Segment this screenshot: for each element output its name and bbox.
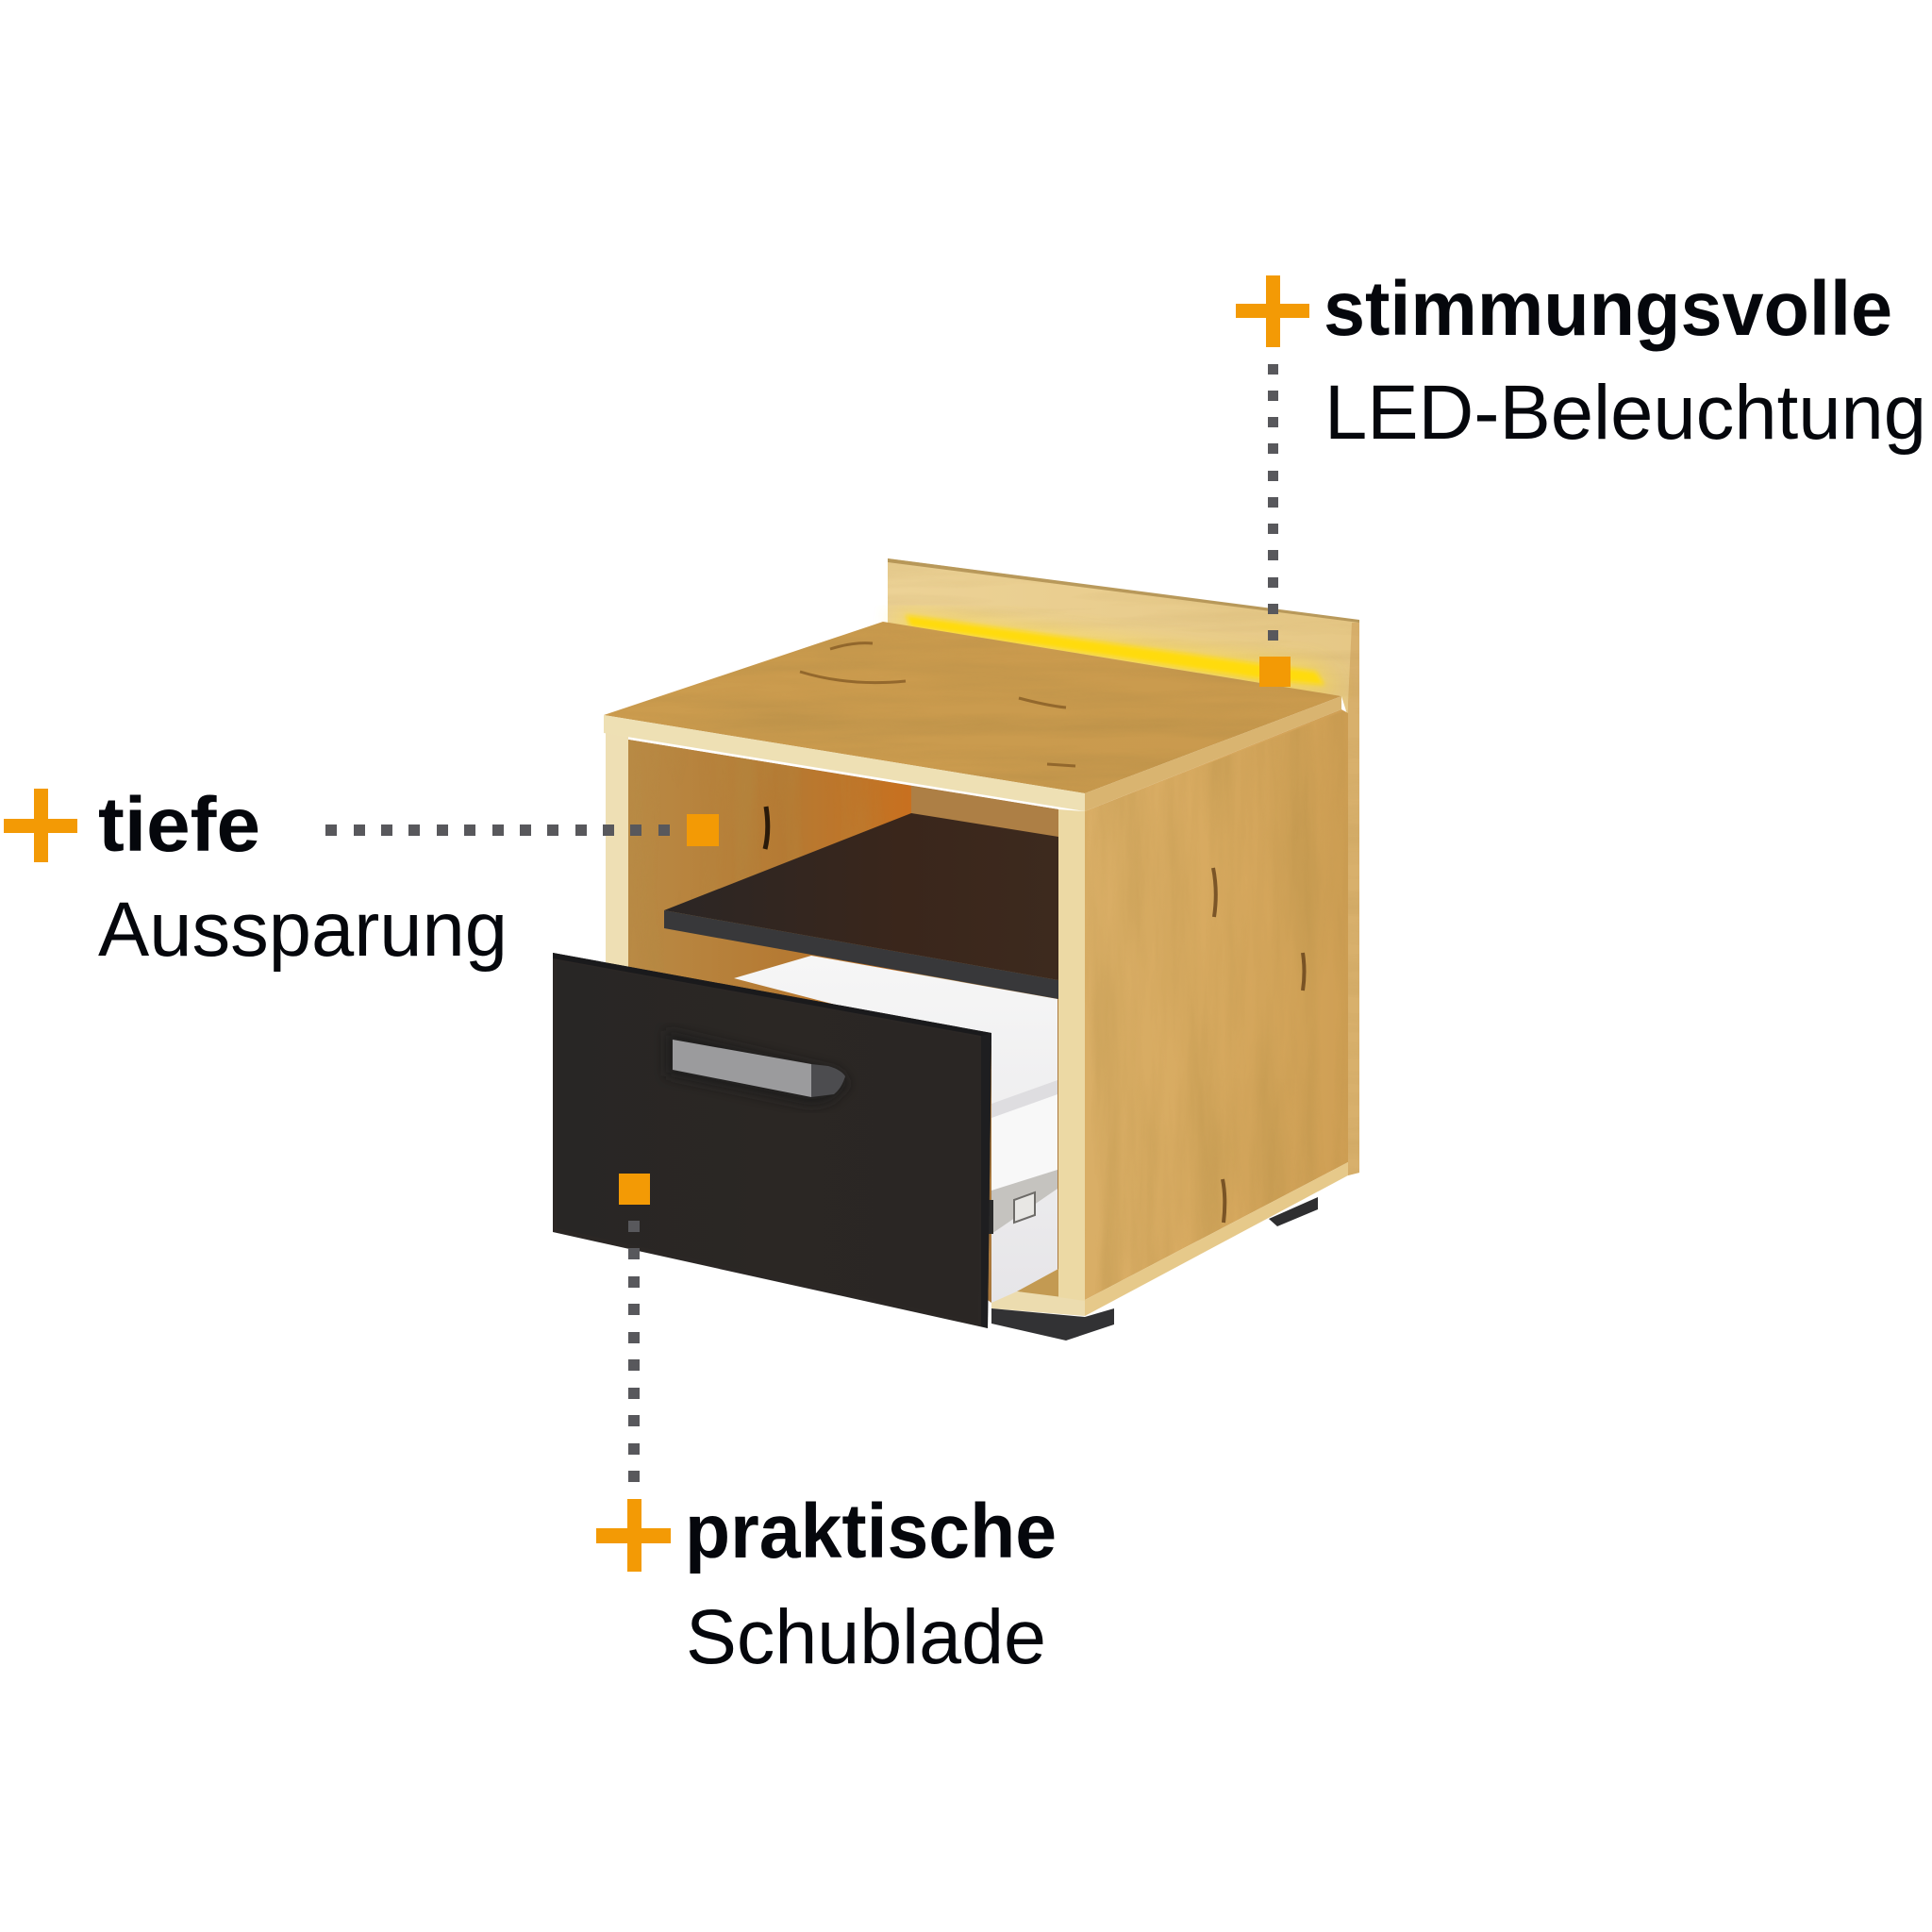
cabinet opening interior	[623, 736, 1058, 1303]
cabinet floor	[991, 1269, 1085, 1316]
plus icon	[4, 789, 77, 862]
callout: recess marker and leader	[4, 782, 719, 973]
leader dots	[325, 824, 670, 836]
marker square	[619, 1174, 650, 1205]
plus icon	[596, 1499, 671, 1572]
foot: front	[991, 1308, 1114, 1341]
drawer front	[553, 953, 991, 1328]
callout: LED lighting marker and leader	[1236, 266, 1926, 687]
label: praktische	[685, 1489, 1057, 1574]
label: tiefe	[98, 782, 260, 868]
left front post	[606, 733, 628, 972]
label: stimmungsvolle	[1324, 266, 1892, 352]
marker square	[1259, 657, 1291, 687]
nightstand illustration	[553, 552, 1368, 1341]
drawer handle	[666, 1030, 849, 1106]
foot: back	[1269, 1197, 1318, 1226]
marker square	[687, 814, 719, 846]
label	[98, 782, 508, 973]
plus icon	[1236, 275, 1309, 347]
back panel with raised edge	[877, 552, 1368, 1184]
LED light strip glow	[896, 613, 1340, 691]
bottom lip of side wall	[1085, 1162, 1348, 1316]
label	[685, 1489, 1057, 1680]
right front post	[1058, 809, 1085, 1301]
leader dots	[628, 1221, 640, 1482]
label: LED-Beleuchtung	[1324, 370, 1926, 456]
drawer slide rail	[988, 1170, 1058, 1234]
label: Aussparung	[98, 887, 508, 973]
white drawer box	[734, 956, 1058, 1303]
leader dots	[1268, 364, 1278, 641]
top surface	[604, 622, 1341, 793]
label	[1324, 266, 1926, 456]
shelf	[664, 813, 1058, 999]
right side wall	[1080, 708, 1354, 1311]
front and side edges of top	[604, 696, 1341, 811]
label: Schublade	[686, 1594, 1046, 1680]
callout: drawer marker and leader	[596, 1174, 1057, 1680]
